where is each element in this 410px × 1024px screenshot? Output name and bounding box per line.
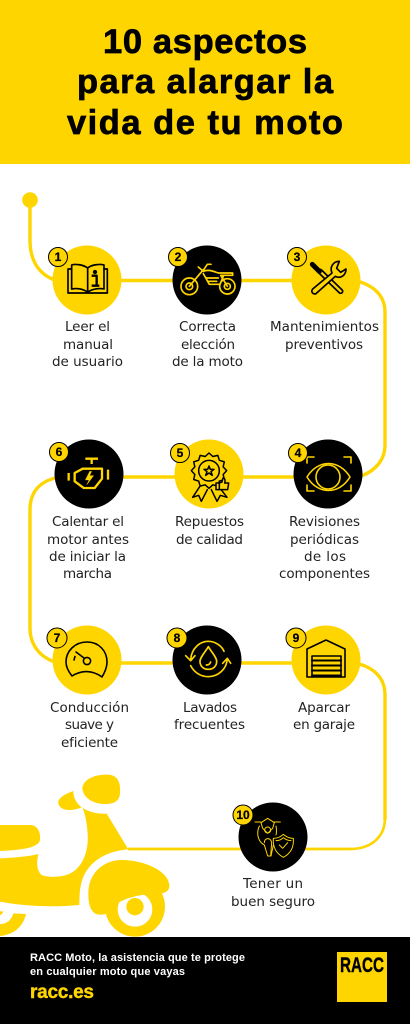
label 2: [172, 319, 243, 370]
label 8: frecuentes: [174, 717, 245, 733]
label 3: preventivos: [285, 337, 363, 353]
label 7: suave y: [65, 717, 114, 733]
label 6: marcha: [63, 566, 112, 582]
label 1: manual: [63, 337, 113, 353]
header band with title: [0, 0, 410, 164]
step 3: mantenimientos: [270, 246, 379, 353]
label 1: de usuario: [52, 354, 123, 370]
icon: book with info mark: [68, 264, 107, 293]
icon: eye in viewfinder: [307, 457, 351, 491]
title: para alargar la: [77, 63, 334, 101]
step 8: lavados: [167, 626, 245, 733]
label 4: periódicas: [290, 532, 359, 548]
step 4: revisiones: [279, 440, 370, 582]
step 6: calentar el motor: [47, 440, 129, 582]
label 2: de la moto: [172, 354, 243, 370]
badge 4: [288, 444, 308, 462]
label 5: [175, 514, 244, 548]
icon: garage: [307, 640, 345, 677]
badge 10: 10: [236, 808, 250, 822]
label 4: componentes: [279, 566, 370, 582]
label 3: Mantenimientos: [270, 319, 379, 335]
step 1: leer el manual: [48, 246, 123, 370]
label 4: de los: [304, 549, 346, 565]
badge 8: 8: [174, 631, 181, 645]
label 10: Tener un: [242, 876, 303, 892]
label 7: eficiente: [61, 735, 118, 751]
footer band: [0, 937, 410, 1024]
footer link: racc.es: [30, 982, 94, 1003]
connecting path: [22, 192, 385, 849]
step 2: elección de la moto: [168, 246, 243, 370]
label 7: Conducción: [50, 700, 129, 716]
badge 9: 9: [293, 631, 300, 645]
label 10: [231, 876, 315, 910]
icon: motorcycle: [181, 264, 235, 295]
step 10: seguro: [231, 802, 315, 910]
scooter illustration: [0, 775, 169, 937]
label 6: de iniciar la: [49, 549, 126, 565]
badge 3: 3: [294, 250, 301, 264]
label 8: [174, 700, 245, 733]
badge 6: 6: [56, 445, 63, 459]
footer tagline: [30, 952, 245, 978]
label 4: Revisiones: [289, 514, 360, 530]
badge 7: 7: [54, 631, 61, 645]
footer tagline: RACC Moto, la asistencia que te protege: [30, 952, 245, 964]
badge 2: 2: [175, 250, 182, 264]
label 2: elección: [181, 337, 235, 353]
icon: speedometer: [66, 642, 107, 677]
title: vida de tu moto: [67, 104, 343, 142]
label 6: [47, 514, 129, 582]
icon: water drop with cycle arrows: [186, 641, 231, 677]
title: [67, 23, 343, 142]
step 7: conducción: [47, 626, 129, 751]
RACC logo: RACC: [340, 954, 384, 977]
icon: quality rosette with thumbs up: [191, 453, 229, 501]
badge 1: 1: [55, 250, 62, 264]
badge 6: [50, 442, 68, 462]
footer tagline: en cualquier moto que vayas: [30, 966, 185, 978]
label 7: [50, 700, 129, 751]
label 9: [293, 700, 355, 733]
RACC logo: [337, 952, 387, 1002]
label 1: Leer el: [65, 319, 110, 335]
badge 4: 4: [295, 446, 302, 460]
label 6: motor antes: [47, 532, 129, 548]
label 9: en garaje: [293, 717, 355, 733]
label 3: [270, 319, 379, 353]
icon: crossed wrench and screwdriver: [312, 261, 346, 294]
label 2: Correcta: [179, 319, 236, 335]
label 9: Aparcar: [298, 700, 350, 716]
label 5: Repuestos: [175, 514, 244, 530]
label 8: Lavados: [183, 700, 237, 716]
label 10: buen seguro: [231, 894, 315, 910]
badge 5: 5: [177, 446, 184, 460]
step 9: aparcar: [286, 626, 360, 733]
label 4: [279, 514, 370, 582]
label 5: de calidad: [176, 532, 243, 548]
step 5: repuestos: [170, 440, 244, 548]
label 1: [52, 319, 123, 370]
title: 10 aspectos: [103, 23, 307, 61]
label 6: Calentar el: [52, 514, 124, 530]
icon: motorcycle front with shield: [255, 818, 293, 857]
icon: engine warning: [69, 459, 108, 488]
